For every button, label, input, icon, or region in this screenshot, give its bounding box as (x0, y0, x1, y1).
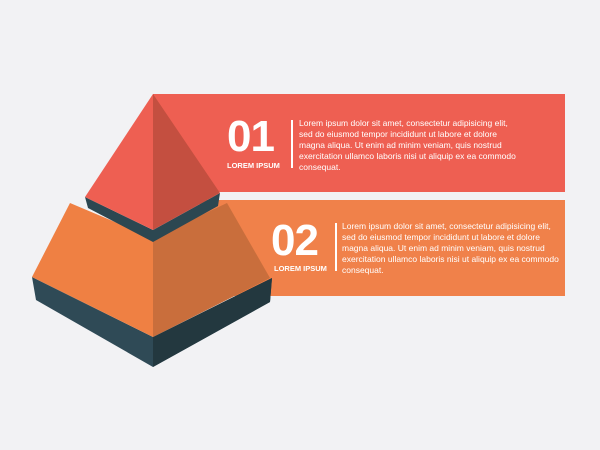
text: magna aliqua. Ut enim ad minim veniam, quis nostrud (342, 243, 545, 253)
top dark band (85, 193, 220, 242)
orange bar panel 02 (200, 200, 565, 296)
red top section (85, 94, 153, 230)
text: magna aliqua. Ut enim ad minim veniam, quis nostrud (299, 140, 502, 150)
text: 02 (271, 216, 318, 265)
orange section (32, 203, 153, 337)
bottom dark base (32, 277, 272, 367)
red bar panel 01 (153, 94, 565, 192)
text: 01 (227, 112, 274, 161)
text: consequat. (342, 265, 384, 275)
text: exercitation ullamco laboris nisi ut aliquip ex ea commodo (299, 151, 516, 161)
text: Lorem ipsum dolor sit amet, consectetur adipisicing elit, (299, 118, 508, 128)
text: Lorem ipsum dolor sit amet, consectetur adipisicing elit, (342, 221, 551, 231)
text: LOREM IPSUM (227, 161, 280, 170)
text: exercitation ullamco laboris nisi ut aliquip ex ea commodo (342, 254, 559, 264)
content 02 (271, 216, 559, 275)
text: sed do eiusmod tempor incididunt ut labore et dolore (299, 129, 497, 139)
content 01 (227, 112, 516, 172)
text: LOREM IPSUM (274, 264, 327, 273)
text: sed do eiusmod tempor incididunt ut labore et dolore (342, 232, 540, 242)
text: consequat. (299, 162, 341, 172)
